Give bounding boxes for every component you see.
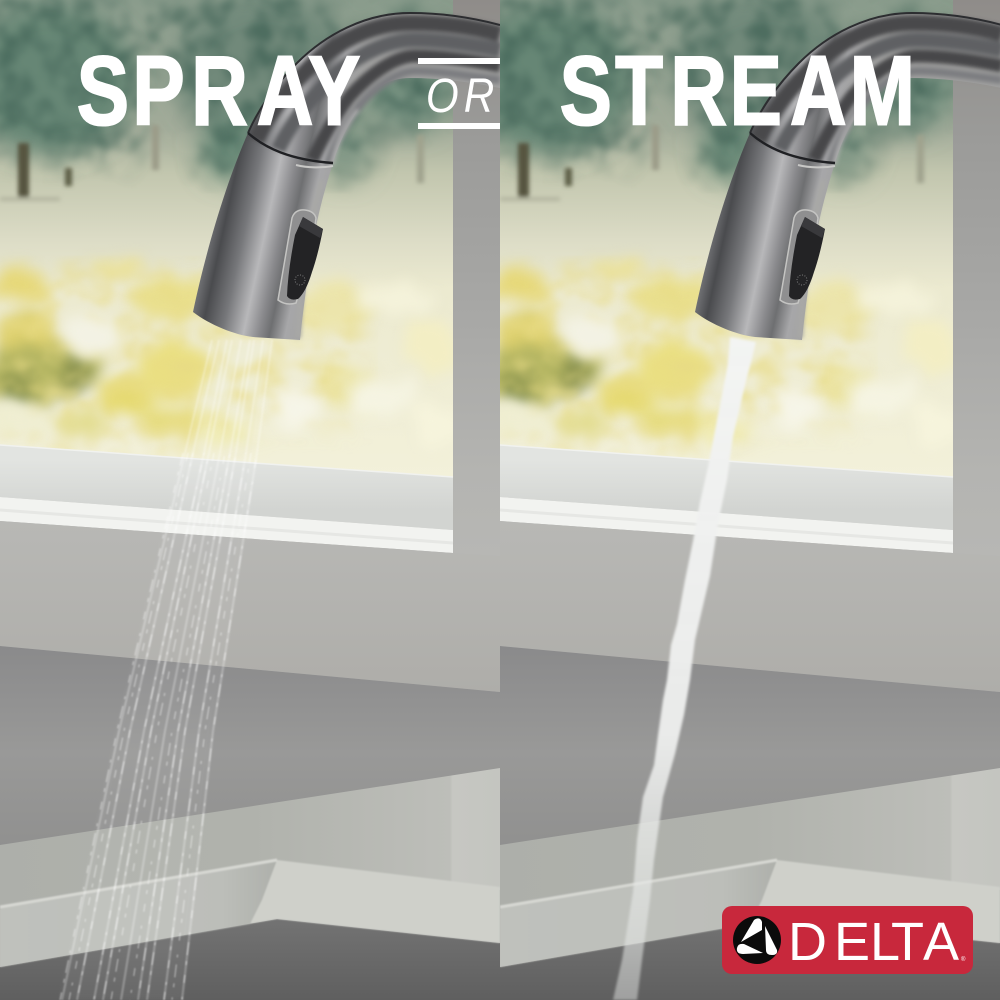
stream water bbox=[613, 337, 756, 1000]
logo: Delta: ® bbox=[961, 956, 966, 963]
logo: Delta: DELTA bbox=[788, 912, 959, 972]
faucet bbox=[193, 13, 500, 340]
word: OR: OR bbox=[426, 68, 494, 123]
faucet bbox=[695, 13, 1000, 340]
logo: Delta bbox=[722, 906, 973, 974]
word: OR bbox=[418, 58, 500, 129]
kitchen window background bbox=[445, 0, 1000, 1000]
title: SPRAY: SPRAY bbox=[77, 36, 360, 145]
spray water bbox=[60, 340, 272, 1000]
title: STREAM: STREAM bbox=[560, 36, 915, 145]
panel: spray bbox=[0, 0, 500, 1000]
panel: stream bbox=[445, 0, 1000, 1000]
kitchen window background bbox=[0, 0, 500, 1000]
